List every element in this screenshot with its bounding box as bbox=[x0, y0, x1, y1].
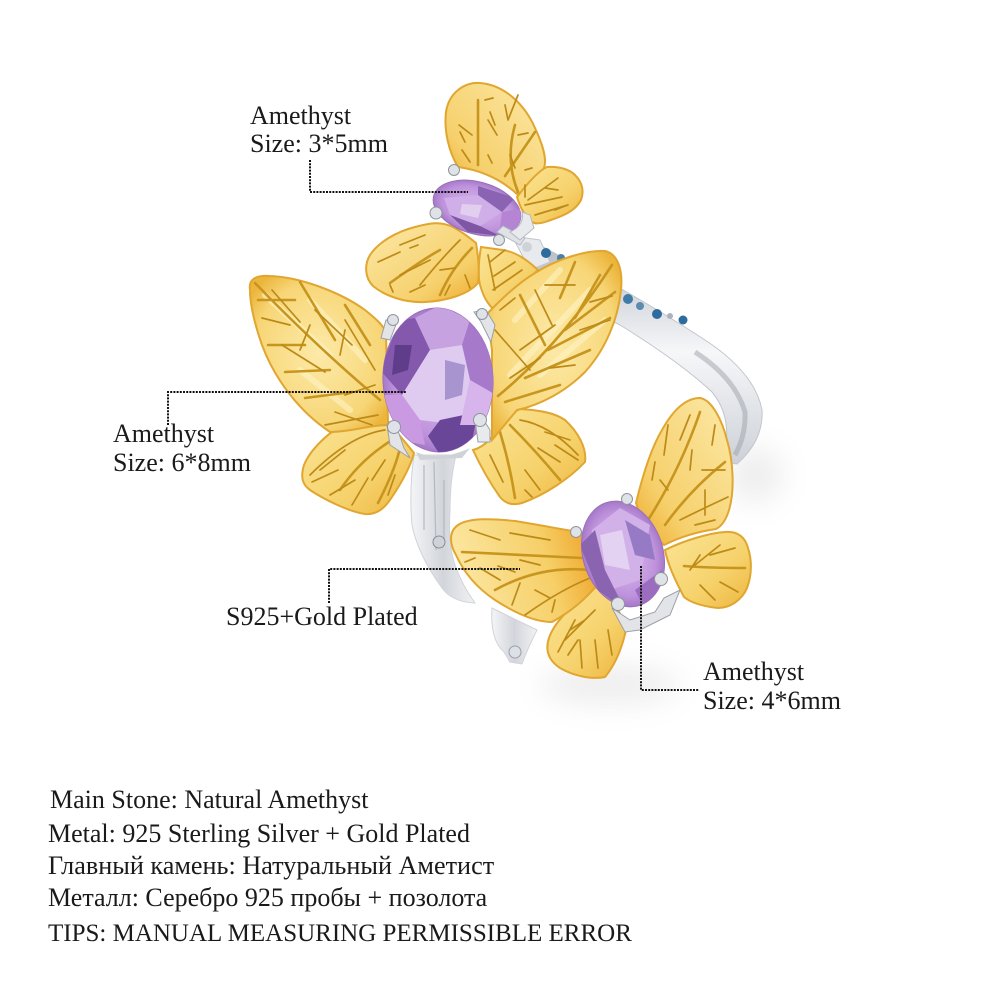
callout: metal: S925+Gold Plated bbox=[226, 602, 418, 631]
specification text block: Main Stone: Natural Amethyst bbox=[50, 785, 369, 814]
callout: top stone bbox=[250, 101, 468, 192]
lower butterfly wing: left large bbox=[451, 519, 597, 622]
specification text block: Metal: 925 Sterling Silver + Gold Plated bbox=[48, 819, 470, 848]
lower stone prongs bbox=[570, 494, 680, 632]
large butterfly wing: right upper bbox=[487, 251, 621, 440]
blue gemstones pave bbox=[512, 236, 688, 324]
soft shadow under ring bbox=[540, 447, 783, 705]
callout: top stone: Amethyst bbox=[250, 101, 352, 130]
lower butterfly wing: right bbox=[665, 532, 751, 608]
specification text block: Металл: Серебро 925 пробы + позолота bbox=[48, 883, 488, 912]
callout: lower stone bbox=[641, 566, 841, 715]
top butterfly wing: right small bbox=[517, 167, 583, 223]
top amethyst stone bbox=[432, 180, 522, 236]
lower butterfly wing: upper right bbox=[636, 398, 733, 545]
butterfly: top small bbox=[366, 83, 583, 310]
silver branch stem bbox=[411, 455, 537, 664]
callout: top stone: Size: 3*5mm bbox=[250, 129, 388, 158]
top stone prongs bbox=[430, 164, 534, 246]
callout: large stone: Amethyst bbox=[113, 419, 215, 448]
top butterfly wing: lower rear bbox=[479, 247, 538, 310]
specification text block bbox=[48, 785, 632, 947]
top butterfly wing: lower left bbox=[366, 223, 479, 302]
specification text block: TIPS: MANUAL MEASURING PERMISSIBLE ERROR bbox=[48, 920, 632, 947]
large butterfly wing: left upper bbox=[250, 276, 388, 432]
callout: metal bbox=[226, 569, 520, 631]
callout: lower stone: Size: 4*6mm bbox=[703, 686, 841, 715]
specification text block: Главный камень: Натуральный Аметист bbox=[48, 851, 495, 880]
infographic canvas bbox=[48, 82, 841, 942]
callout: lower stone: Amethyst bbox=[703, 657, 805, 686]
butterfly: lower right bbox=[451, 398, 751, 678]
lower butterfly wing: bottom bbox=[547, 587, 626, 678]
callout: large stone bbox=[113, 392, 406, 477]
lower amethyst stone bbox=[580, 500, 666, 608]
butterfly: large centre bbox=[250, 251, 621, 514]
large butterfly wing: lower left bbox=[302, 420, 414, 514]
top butterfly wing: upper large bbox=[446, 83, 545, 195]
large butterfly wing: lower right bbox=[473, 409, 585, 504]
large amethyst stone bbox=[379, 305, 497, 455]
silver ring band bbox=[520, 240, 762, 464]
callout: large stone: Size: 6*8mm bbox=[113, 448, 251, 477]
large stone prongs bbox=[381, 308, 495, 460]
